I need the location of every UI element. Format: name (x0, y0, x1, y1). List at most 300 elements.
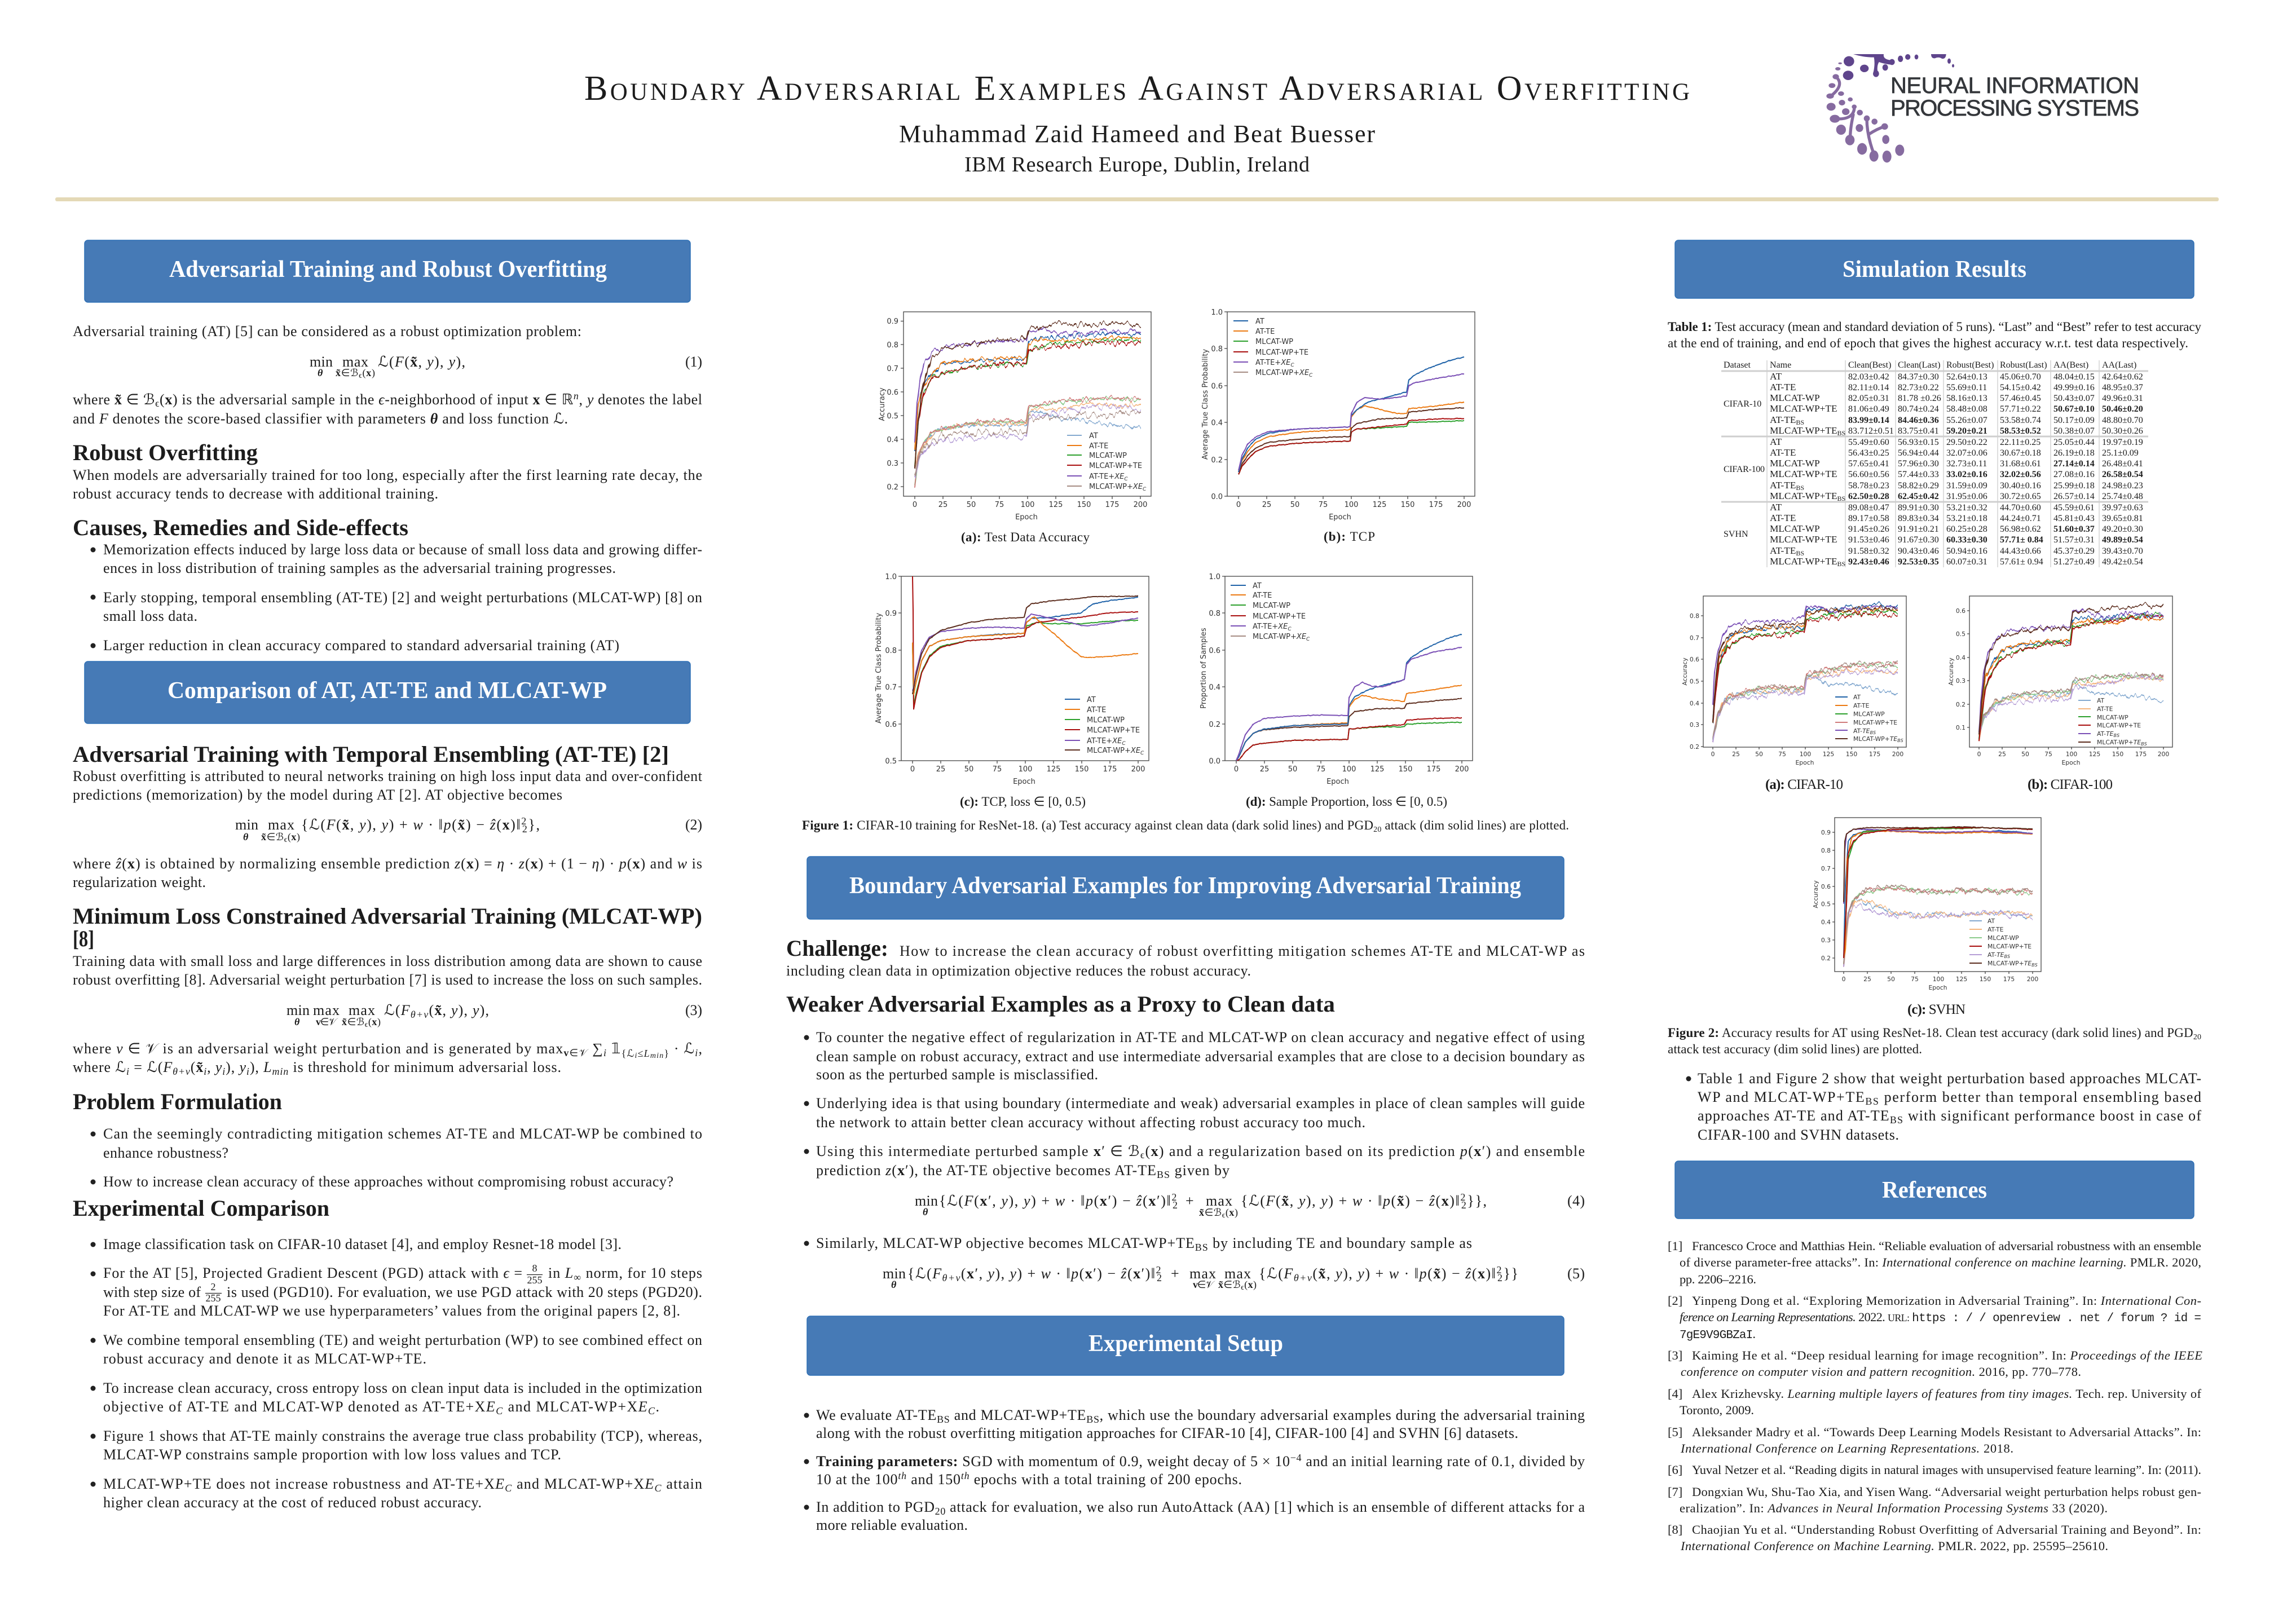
text: weight perturbation: where v ∈ 𝒱 is an adversarial weight perturbation and is generated by max (73, 1040, 563, 1057)
table 1: 25.74±0.48 (2102, 492, 2143, 501)
equation 1 (310, 354, 702, 380)
bullet list: experimental comparison: MLCAT-WP+TE does not increase robustness and AT-TE+XE (103, 1476, 504, 1492)
bullet list: experimental setup: In addition to PGD (816, 1499, 935, 1515)
text: weight perturbation: is threshold for minimum adversarial loss. (293, 1059, 561, 1075)
legend: AT (1853, 694, 1861, 701)
equation 5: max (1189, 1265, 1216, 1282)
legend (1233, 317, 1313, 378)
axes labels: 50 (964, 765, 973, 774)
equation 3: θ (294, 1016, 300, 1027)
equation 5: ( (961, 1265, 966, 1282)
axes labels: 75 (1911, 976, 1919, 983)
table 1: MLCAT-WP+TE (1770, 556, 1845, 568)
references list: International Conference on Machine Learning. PMLR. 2022, pp. 25595–25610. (1680, 1539, 2108, 1553)
bullet list: experimental setup: and MLCAT-WP+TE (954, 1407, 1086, 1423)
text: weight perturbation: i (126, 1066, 129, 1077)
heading: robust overfitting: Robust Overfitting (73, 440, 258, 465)
legend: MLCAT-WP+TE (1987, 960, 2031, 967)
axes labels: 0.3 (1690, 721, 1699, 729)
text: MLCAT-WP: Training data with small loss and large differences in loss distribution among data are shown to cause (73, 953, 702, 969)
table 1: 39.43±0.70 (2102, 546, 2143, 556)
axes labels: 0.0 (1209, 757, 1220, 766)
bullet list: questions: Can the seemingly contradicting mitigation schemes AT-TE and MLCAT-WP be combined to (103, 1126, 702, 1142)
equation 4: x̃∈ℬ (1199, 1207, 1222, 1218)
text: weight perturbation: ), (250, 1059, 263, 1075)
table 1: 57.44±0.33 (1898, 470, 1939, 479)
bullet list: experimental setup: th (961, 1470, 969, 1481)
text: weight perturbation: i (222, 1066, 225, 1077)
table 1: 45.59±0.61 (2053, 503, 2095, 513)
axes labels: 25 (1863, 976, 1871, 983)
axes labels: 0.8 (887, 341, 898, 350)
axes labels: 0 (1977, 751, 1981, 758)
text: where definitions: n (574, 390, 579, 401)
bullet list: experimental comparison: Image classification task on CIFAR-10 dataset [4], and employ Resnet-18 model [3]. (103, 1236, 622, 1252)
table 1: 31.95±0.06 (1946, 492, 1987, 501)
equation 5: x) (1248, 1279, 1257, 1290)
chart: SVHN accuracy (1812, 818, 2041, 991)
bullet list: experimental setup: along with the robust overfitting mitigation approaches for CIFAR-10 [4], CIFAR-100 [4] and SVHN [6] datasets. (816, 1425, 1518, 1441)
bullet list: experimental comparison: E (638, 1398, 647, 1415)
axes labels: 0.4 (1209, 683, 1220, 692)
bullet list: experimental comparison: in L (548, 1265, 573, 1281)
legend: MLCAT-WP+XE (1089, 483, 1143, 491)
table 1: Robust(Last) (2000, 360, 2047, 370)
legend: C (1140, 751, 1144, 756)
axes labels: Accuracy (1812, 880, 1819, 908)
axes labels: 75 (1316, 765, 1325, 774)
table 1: 84.37±0.30 (1898, 372, 1939, 382)
equation 5: ( (1244, 1279, 1248, 1291)
legend: C (1288, 626, 1292, 632)
legend: AT-TE (1987, 951, 2004, 959)
text: where definitions: where x̃ ∈ ℬ (73, 391, 155, 408)
legend: AT-TE (1089, 442, 1108, 451)
axes labels: 125 (1049, 501, 1063, 509)
table 1: 81.78 ±0.26 (1898, 394, 1941, 403)
table 1: 51.57±0.31 (2053, 535, 2095, 545)
equation 5: 2 (1497, 1272, 1502, 1283)
legend: AT-TE (2097, 705, 2113, 713)
heading: MLCAT-WP (73, 903, 702, 951)
bullet list: experimental comparison: attain (666, 1476, 702, 1492)
bullet list: experimental setup: th (898, 1470, 906, 1481)
axes labels: 0.5 (1690, 678, 1699, 685)
equation 3: (3) (685, 1002, 702, 1018)
legend: C (1290, 363, 1294, 368)
bullet list: experimental comparison: 255 (527, 1274, 543, 1286)
table 1: 49.20±0.30 (2102, 524, 2143, 534)
bullet: findings: WP and MLCAT-WP+TE (1698, 1089, 1865, 1105)
bullet list: causes: small loss data. (103, 608, 197, 624)
text: weight perturbation: L (644, 1048, 650, 1059)
text: weight perturbation: x̃ (196, 1059, 203, 1075)
table 1: Dataset (1724, 360, 1751, 370)
table 1: 57.71± 0.84 (2000, 535, 2043, 545)
references list: Yinpeng Dong et al. “Exploring Memorization in Adversarial Training”. In: International Con- (1692, 1294, 2201, 1308)
legend: MLCAT-WP+TE (1853, 719, 1897, 726)
bullet: MLCAT-WP objective: Similarly, MLCAT-WP objective becomes MLCAT-WP+TE (816, 1235, 1195, 1251)
section header: simulation results: Simulation Results (1843, 257, 2026, 283)
table 1: CIFAR-10 (1724, 399, 1761, 409)
logo: NeurIPS (1826, 54, 2139, 162)
table 1: 84.46±0.36 (1898, 416, 1939, 425)
equation 5: {ℒ(F (1259, 1265, 1293, 1282)
table 1: 55.69±0.11 (1946, 383, 1987, 392)
text: where definitions: , (579, 391, 583, 408)
axes labels: 0 (1842, 976, 1846, 983)
text: where definitions: y denotes the label (587, 391, 702, 408)
axes labels: 75 (2044, 751, 2052, 758)
bullet list: experimental comparison: C (505, 1482, 512, 1494)
equation 2: ( (288, 831, 291, 843)
equation 5: min (883, 1265, 906, 1282)
legend: AT (1087, 696, 1096, 704)
section header: references (1675, 1161, 2194, 1219)
bullet: findings: CIFAR-100 and SVHN datasets. (1698, 1127, 1899, 1143)
bullet list: experimental setup: attack for evaluation, we also run AutoAttack (AA) [1] which is an ensemble of different attacks for a (950, 1499, 1585, 1515)
heading: MLCAT-WP: Minimum Loss Constrained Adversarial Training (MLCAT-WP) (73, 903, 702, 929)
table 1: 82.03±0.42 (1848, 372, 1889, 382)
text: where definitions (73, 390, 702, 427)
table 1: 91.53±0.46 (1848, 535, 1889, 545)
bullet list: experimental setup: −4 (1290, 1452, 1302, 1463)
text: weight perturbation: i (246, 1066, 249, 1077)
axes labels: 25 (1262, 501, 1271, 509)
bullet list: causes: Larger reduction in clean accuracy compared to standard adversarial training (AT) (103, 637, 619, 654)
table 1: 31.59±0.09 (1946, 481, 1987, 491)
equation 3: ϵ (365, 1021, 368, 1029)
bullet list: boundary samples: BS (1157, 1169, 1170, 1180)
bullet list: causes: Memorization effects induced by large loss data or because of small loss data and growing differ- (103, 541, 702, 558)
axes labels: 75 (995, 501, 1004, 509)
table 1: 57.46±0.45 (2000, 394, 2041, 403)
references list: eralization”. In: Advances in Neural Information Processing Systems 33 (2020). (1680, 1501, 2108, 1515)
table 1 (1721, 360, 2148, 568)
bullet list: boundary samples: given by (1175, 1162, 1229, 1179)
axes labels (1681, 612, 1903, 766)
legend: MLCAT-WP+TE (1853, 735, 1897, 743)
table 1: AA(Best) (2053, 360, 2088, 370)
text: weight perturbation: } (664, 1048, 669, 1059)
legend: C (1143, 487, 1147, 492)
text: weight perturbation: i (204, 1066, 206, 1077)
axes labels: 150 (2112, 751, 2123, 758)
legend (1835, 694, 1903, 743)
axes labels: 0.7 (1690, 634, 1699, 642)
bullet list: boundary samples: Using this intermediate perturbed sample x′ ∈ ℬ (816, 1143, 1139, 1159)
axes labels: 25 (1732, 751, 1740, 758)
bullet list: questions: enhance robustness? (103, 1145, 228, 1161)
axes labels: 25 (1998, 751, 2006, 758)
equation 5: v∈𝒱 (1193, 1279, 1215, 1290)
table 1: 89.83±0.34 (1898, 514, 1939, 523)
references list: 7gE9V9GBZaI. (1680, 1327, 1756, 1342)
bullet: findings: BS (1865, 1096, 1879, 1107)
table 1: 26.58±0.54 (2102, 470, 2143, 479)
legend (1231, 582, 1310, 642)
legend (1067, 432, 1147, 492)
section header: boundary adversarial examples: Boundary Adversarial Examples for Improving Adversarial Training (849, 873, 1521, 899)
text: robust overfitting: robust accuracy tends to decrease with additional training. (73, 486, 438, 502)
axes labels: 0.6 (885, 721, 897, 729)
section header: experimental setup: Experimental Setup (1088, 1331, 1283, 1357)
bullet list: experimental comparison: objective of AT-TE and MLCAT-WP denoted as AT-TE+XE (103, 1398, 495, 1415)
table 1: 25.99±0.18 (2053, 481, 2095, 491)
bullet list: experimental comparison: MLCAT-WP constrains sample proportion with low loss values and TCP. (103, 1446, 561, 1463)
table 1: 48.95±0.37 (2102, 383, 2143, 392)
bullet list: boundary samples: x) and a regularization based on its prediction p(x′) and ensemble (1151, 1143, 1585, 1159)
equation 5 (883, 1264, 1585, 1292)
text: weight perturbation: where ℒ (73, 1059, 126, 1075)
plot frame and ticks (1222, 576, 1473, 764)
text: weight perturbation: {ℒ (622, 1048, 634, 1059)
bullet list: experimental comparison: To increase clean accuracy, cross entropy loss on clean input data is included in the optimization (103, 1380, 702, 1396)
equation 5: }} (1504, 1265, 1518, 1282)
panel: middle column (786, 308, 1585, 1533)
equation 2: max (268, 817, 294, 833)
axes labels: 1.0 (1209, 573, 1220, 581)
bullet list: boundary samples: clean sample on robust accuracy, extract and use intermediate adversarial examples that are close to a decision boundary as (816, 1048, 1585, 1065)
axes labels: 0.4 (887, 436, 898, 444)
table 1: 56.93±0.15 (1898, 438, 1939, 447)
table 1: MLCAT-WP+TE (1770, 469, 1837, 479)
equation 5: 2 (1157, 1272, 1162, 1283)
table 1: 83.75±0.41 (1898, 426, 1939, 436)
bullet list: experimental comparison: C (654, 1482, 662, 1494)
axes labels: 200 (1131, 765, 1145, 774)
bullet list: experimental comparison: For AT-TE and MLCAT-WP we use hyperparameters’ values from the original papers [2, 8]. (103, 1303, 680, 1319)
equation 3: x) (372, 1016, 381, 1027)
logo mark dots (1826, 54, 1954, 162)
references list: [5] (1668, 1425, 1682, 1439)
table 1: MLCAT-WP+TE (1770, 491, 1845, 502)
references list: [8] (1668, 1522, 1682, 1537)
axes labels: 0.0 (1211, 493, 1223, 501)
table 1: 26.57±0.14 (2053, 492, 2095, 501)
equation 4: 2 (1173, 1199, 1178, 1211)
legend: AT-TE (1255, 328, 1275, 336)
bullet list: experimental comparison: For the AT [5], Projected Gradient Descent (PGD) attack with ϵ = (103, 1265, 522, 1281)
axes labels: 100 (1019, 765, 1032, 774)
axes labels: 125 (2089, 751, 2100, 758)
bullet: MLCAT-WP objective (804, 1235, 1472, 1254)
table 1: 89.91±0.30 (1898, 503, 1939, 513)
table 1: 57.96±0.30 (1898, 459, 1939, 469)
table 1: Clean(Best) (1848, 360, 1891, 370)
table 1: CIFAR-100 (1724, 465, 1765, 474)
equation 5: + (1171, 1265, 1179, 1282)
equation 5: ( (1312, 1265, 1317, 1282)
table 1: 32.73±0.11 (1946, 459, 1987, 469)
table 1: 49.96±0.31 (2102, 394, 2143, 403)
axes labels: 175 (2003, 976, 2015, 983)
axes labels: 200 (1457, 501, 1471, 509)
bullet list: boundary samples: soon as the perturbed sample is misclassified. (816, 1066, 1098, 1083)
text: weight perturbation: min (272, 1066, 288, 1077)
axes labels: 0.3 (887, 460, 898, 468)
plot frame and ticks (1701, 596, 1906, 749)
legend: MLCAT-WP+TE (2097, 739, 2141, 746)
text: where definitions: x) is the adversarial sample in the ϵ-neighborhood of input x ∈ ℝ (165, 391, 573, 408)
table 1: 57.71±0.22 (2000, 404, 2041, 414)
text: AT-TE: predictions (memorization) by the model during AT [2]. AT objective becomes (73, 787, 562, 803)
legend: AT (1089, 432, 1098, 440)
text: normalization (73, 855, 702, 890)
section header: references: References (1882, 1177, 1987, 1203)
sample proportion curves (1236, 634, 1462, 761)
bullet: findings: BS (1890, 1114, 1903, 1126)
axes labels: 0.6 (887, 389, 898, 397)
equation 5: θ+v (1294, 1272, 1312, 1283)
table 1: 54.15±0.42 (2000, 383, 2041, 392)
legend: MLCAT-WP+XE (1087, 747, 1140, 755)
table 1: 60.25±0.28 (1946, 524, 1987, 534)
table 1: 53.21±0.32 (1946, 503, 1987, 513)
text: challenge (786, 935, 1585, 979)
equation 5: x̃∈ℬ (1218, 1279, 1241, 1290)
references list: [6] (1668, 1463, 1682, 1477)
text: robust overfitting (73, 467, 702, 502)
text: weight perturbation: y (214, 1059, 222, 1075)
axes labels: 0.5 (887, 412, 898, 421)
axes labels: Epoch (1326, 778, 1349, 786)
table 1: 60.33±0.30 (1946, 535, 1987, 545)
table 1: 58.82±0.29 (1898, 481, 1939, 491)
equation 2: 2 (521, 815, 526, 827)
text: weight perturbation: i (635, 1052, 637, 1060)
table 1: 57.65±0.41 (1848, 459, 1889, 469)
table 1: 49.42±0.54 (2102, 557, 2143, 567)
figure 1 caption: 20 (1373, 826, 1381, 834)
axes labels: Accuracy (1681, 657, 1689, 686)
references list: Francesco Croce and Matthias Hein. “Reliable evaluation of adversarial robustness with an ensemble (1692, 1239, 2201, 1253)
axes labels: 0.6 (1211, 382, 1223, 391)
axes labels: 0.4 (1211, 419, 1223, 427)
figure 2 caption: attack test accuracy (dim solid lines) are plotted. (1668, 1042, 1922, 1056)
equation 2 (235, 815, 702, 844)
axes labels: 100 (1933, 976, 1944, 983)
table 1: 53.58±0.74 (2000, 416, 2041, 425)
axes labels: 125 (1047, 765, 1060, 774)
axes labels: 100 (2066, 751, 2077, 758)
table 1: 22.11±0.25 (2000, 438, 2041, 447)
axes labels: 50 (2021, 751, 2029, 758)
axes labels: 0.5 (885, 757, 897, 766)
table 1: 92.53±0.35 (1898, 557, 1939, 567)
equation 1: ϵ (359, 372, 362, 380)
figure 2 caption: Figure 2: Accuracy results for AT using ResNet-18. Clean test accuracy (dark solid lines) and PGD (1668, 1026, 2193, 1040)
axes labels: 0.8 (1821, 847, 1831, 854)
legend: MLCAT-WP (1255, 338, 1293, 346)
table 1: 30.72±0.65 (2000, 492, 2041, 501)
axes labels: 0.8 (1209, 610, 1220, 618)
axes labels: 150 (1075, 765, 1088, 774)
chart: CIFAR-10 accuracy (1681, 596, 1906, 766)
table 1: AT-TE (1770, 480, 1804, 492)
plot frame and ticks (1224, 312, 1475, 499)
table 1: 39.65±0.81 (2102, 514, 2143, 523)
axes labels: 0.9 (885, 610, 897, 618)
table 1: 27.14±0.14 (2053, 459, 2095, 469)
chart: TCP low loss (875, 573, 1149, 786)
text: AT intro: Adversarial training (AT) [5] can be considered as a robust optimization problem: (73, 323, 581, 339)
equation 3: v∈𝒱 (316, 1016, 338, 1027)
axes labels: Epoch (1329, 513, 1351, 522)
table 1: AT (1770, 436, 1782, 447)
axes labels: 0.9 (1821, 829, 1831, 836)
table 1: MLCAT-WP (1770, 523, 1820, 534)
axes labels: Epoch (1015, 513, 1038, 522)
legend: AT-TE (1987, 926, 2004, 933)
bullet list: experimental comparison (90, 1236, 702, 1511)
caption: (b): (b): TCP (1324, 529, 1375, 544)
table 1: 33.02±0.16 (1946, 470, 1987, 479)
axes labels: 200 (1455, 765, 1469, 774)
table 1: 56.43±0.25 (1848, 448, 1889, 458)
table 1: SVHN (1724, 529, 1748, 539)
text: weight perturbation: i (695, 1047, 698, 1058)
plot frame and ticks (901, 312, 1151, 499)
table 1: 80.74±0.24 (1898, 404, 1939, 414)
bullet list: experimental setup: , which use the boundary adversarial examples during the adversarial training (1100, 1407, 1585, 1423)
references list: Yuval Netzer et al. “Reading digits in natural images with unsupervised feature learning”. In: (2011). (1692, 1463, 2201, 1477)
bullet list: causes: Early stopping, temporal ensembling (AT-TE) [2] and weight perturbations (MLCAT-WP) [8] on (103, 589, 702, 606)
axes labels: 0.6 (1956, 607, 1965, 615)
axes labels: 200 (2027, 976, 2038, 983)
references list: Kaiming He et al. “Deep residual learning for image recognition”. In: Proceedings of the IEEE (1692, 1348, 2202, 1362)
axes labels: 175 (1429, 501, 1443, 509)
heading: weaker adversarial examples: Weaker Adversarial Examples as a Proxy to Clean data (786, 991, 1335, 1017)
table 1: 27.08±0.16 (2053, 470, 2095, 479)
bullet list: experimental setup: BS (937, 1414, 950, 1425)
equation 3: ( (429, 1002, 434, 1018)
text: weight perturbation: = ℒ( (134, 1059, 162, 1075)
axes labels: 0.3 (1956, 677, 1965, 685)
heading: causes: Causes, Remedies and Side-effects (73, 515, 408, 540)
references list: ference on Learning Representations. 2022. URL: https : / / openreview . net / forum ? id = (1680, 1310, 2201, 1325)
text: challenge: How to increase the clean accuracy of robust overfitting mitigation schemes AT-TE and MLCAT-WP as (900, 943, 1585, 959)
equation 4: 2 (1171, 1191, 1176, 1203)
table 1: 26.19±0.18 (2053, 448, 2095, 458)
table 1: 52.64±0.13 (1946, 372, 1987, 382)
bullet list: experimental comparison: with step size of (103, 1284, 201, 1300)
legend: MLCAT-WP (1089, 452, 1127, 460)
equation 3: ( (368, 1016, 372, 1028)
bullet list: experimental setup: and an initial learning rate of 0.1, divided by (1306, 1453, 1585, 1469)
axes labels: 100 (1021, 501, 1034, 509)
bullet list: questions: How to increase clean accuracy of these approaches without compromising robust accuracy? (103, 1173, 673, 1190)
bullet list: experimental setup: Training parameters: SGD with momentum of 0.9, weight decay of 5 × 10 (816, 1453, 1290, 1469)
equation 4: 2 (1461, 1199, 1466, 1211)
equation 1: ( (363, 367, 366, 379)
table 1 caption: Table 1: Test accuracy (mean and standard deviation of 5 runs). “Last” and “Best” refer to test accuracy (1668, 320, 2202, 334)
text: weight perturbation: · ℒ (674, 1040, 694, 1057)
equation 5: 2 (1497, 1264, 1502, 1276)
table 1: BS (1837, 495, 1845, 502)
axes labels: 0.8 (1690, 612, 1699, 620)
table 1: 29.50±0.22 (1946, 438, 1987, 447)
plot frame and ticks (1967, 596, 2172, 749)
axes labels: 0.8 (1211, 345, 1223, 354)
text: weight perturbation: y (238, 1059, 246, 1075)
equation 4: x) (1229, 1207, 1238, 1218)
text: weight perturbation: , (699, 1040, 702, 1057)
equation 1: min (310, 354, 333, 370)
table 1: AT-TE (1770, 447, 1796, 458)
axes labels: 0.7 (887, 365, 898, 373)
axes labels: 50 (1755, 751, 1763, 758)
